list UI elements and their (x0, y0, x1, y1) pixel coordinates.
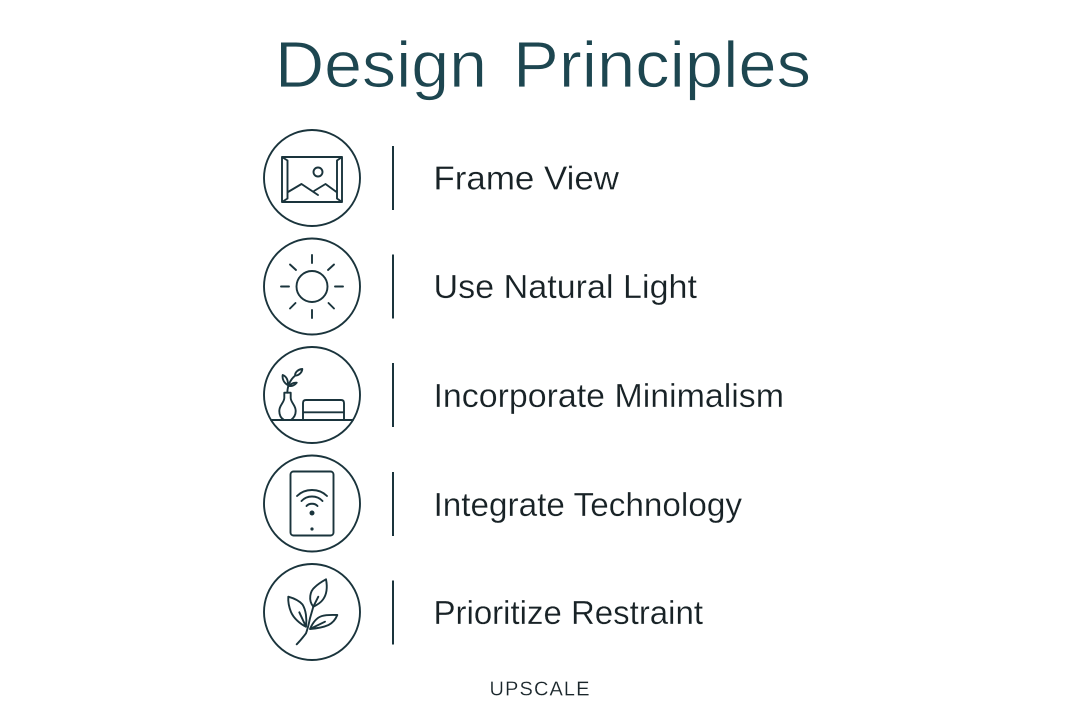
brand wordmark: UPSCALE (490, 678, 590, 700)
divider (392, 146, 394, 210)
icon: sun (264, 238, 360, 334)
icon: leaf sprig (264, 564, 360, 660)
label: Frame View (434, 160, 620, 198)
row: Use Natural Light (264, 238, 698, 334)
label: Use Natural Light (434, 269, 698, 306)
divider (392, 580, 394, 644)
label: Incorporate Minimalism (434, 378, 784, 415)
label: Integrate Technology (434, 487, 742, 524)
row: Frame View (264, 130, 620, 226)
row: Integrate Technology (264, 456, 742, 552)
title (275, 28, 811, 101)
row: Prioritize Restraint (264, 564, 704, 660)
icon: phone with wifi (264, 456, 360, 552)
divider (392, 254, 394, 318)
divider (392, 363, 394, 427)
title: Design (275, 28, 487, 101)
label: Prioritize Restraint (434, 595, 704, 632)
title: Principles (513, 28, 811, 101)
divider (392, 472, 394, 536)
icon: vase and bench (264, 347, 360, 443)
icon: framed landscape view (264, 130, 360, 226)
row: Incorporate Minimalism (264, 347, 784, 443)
